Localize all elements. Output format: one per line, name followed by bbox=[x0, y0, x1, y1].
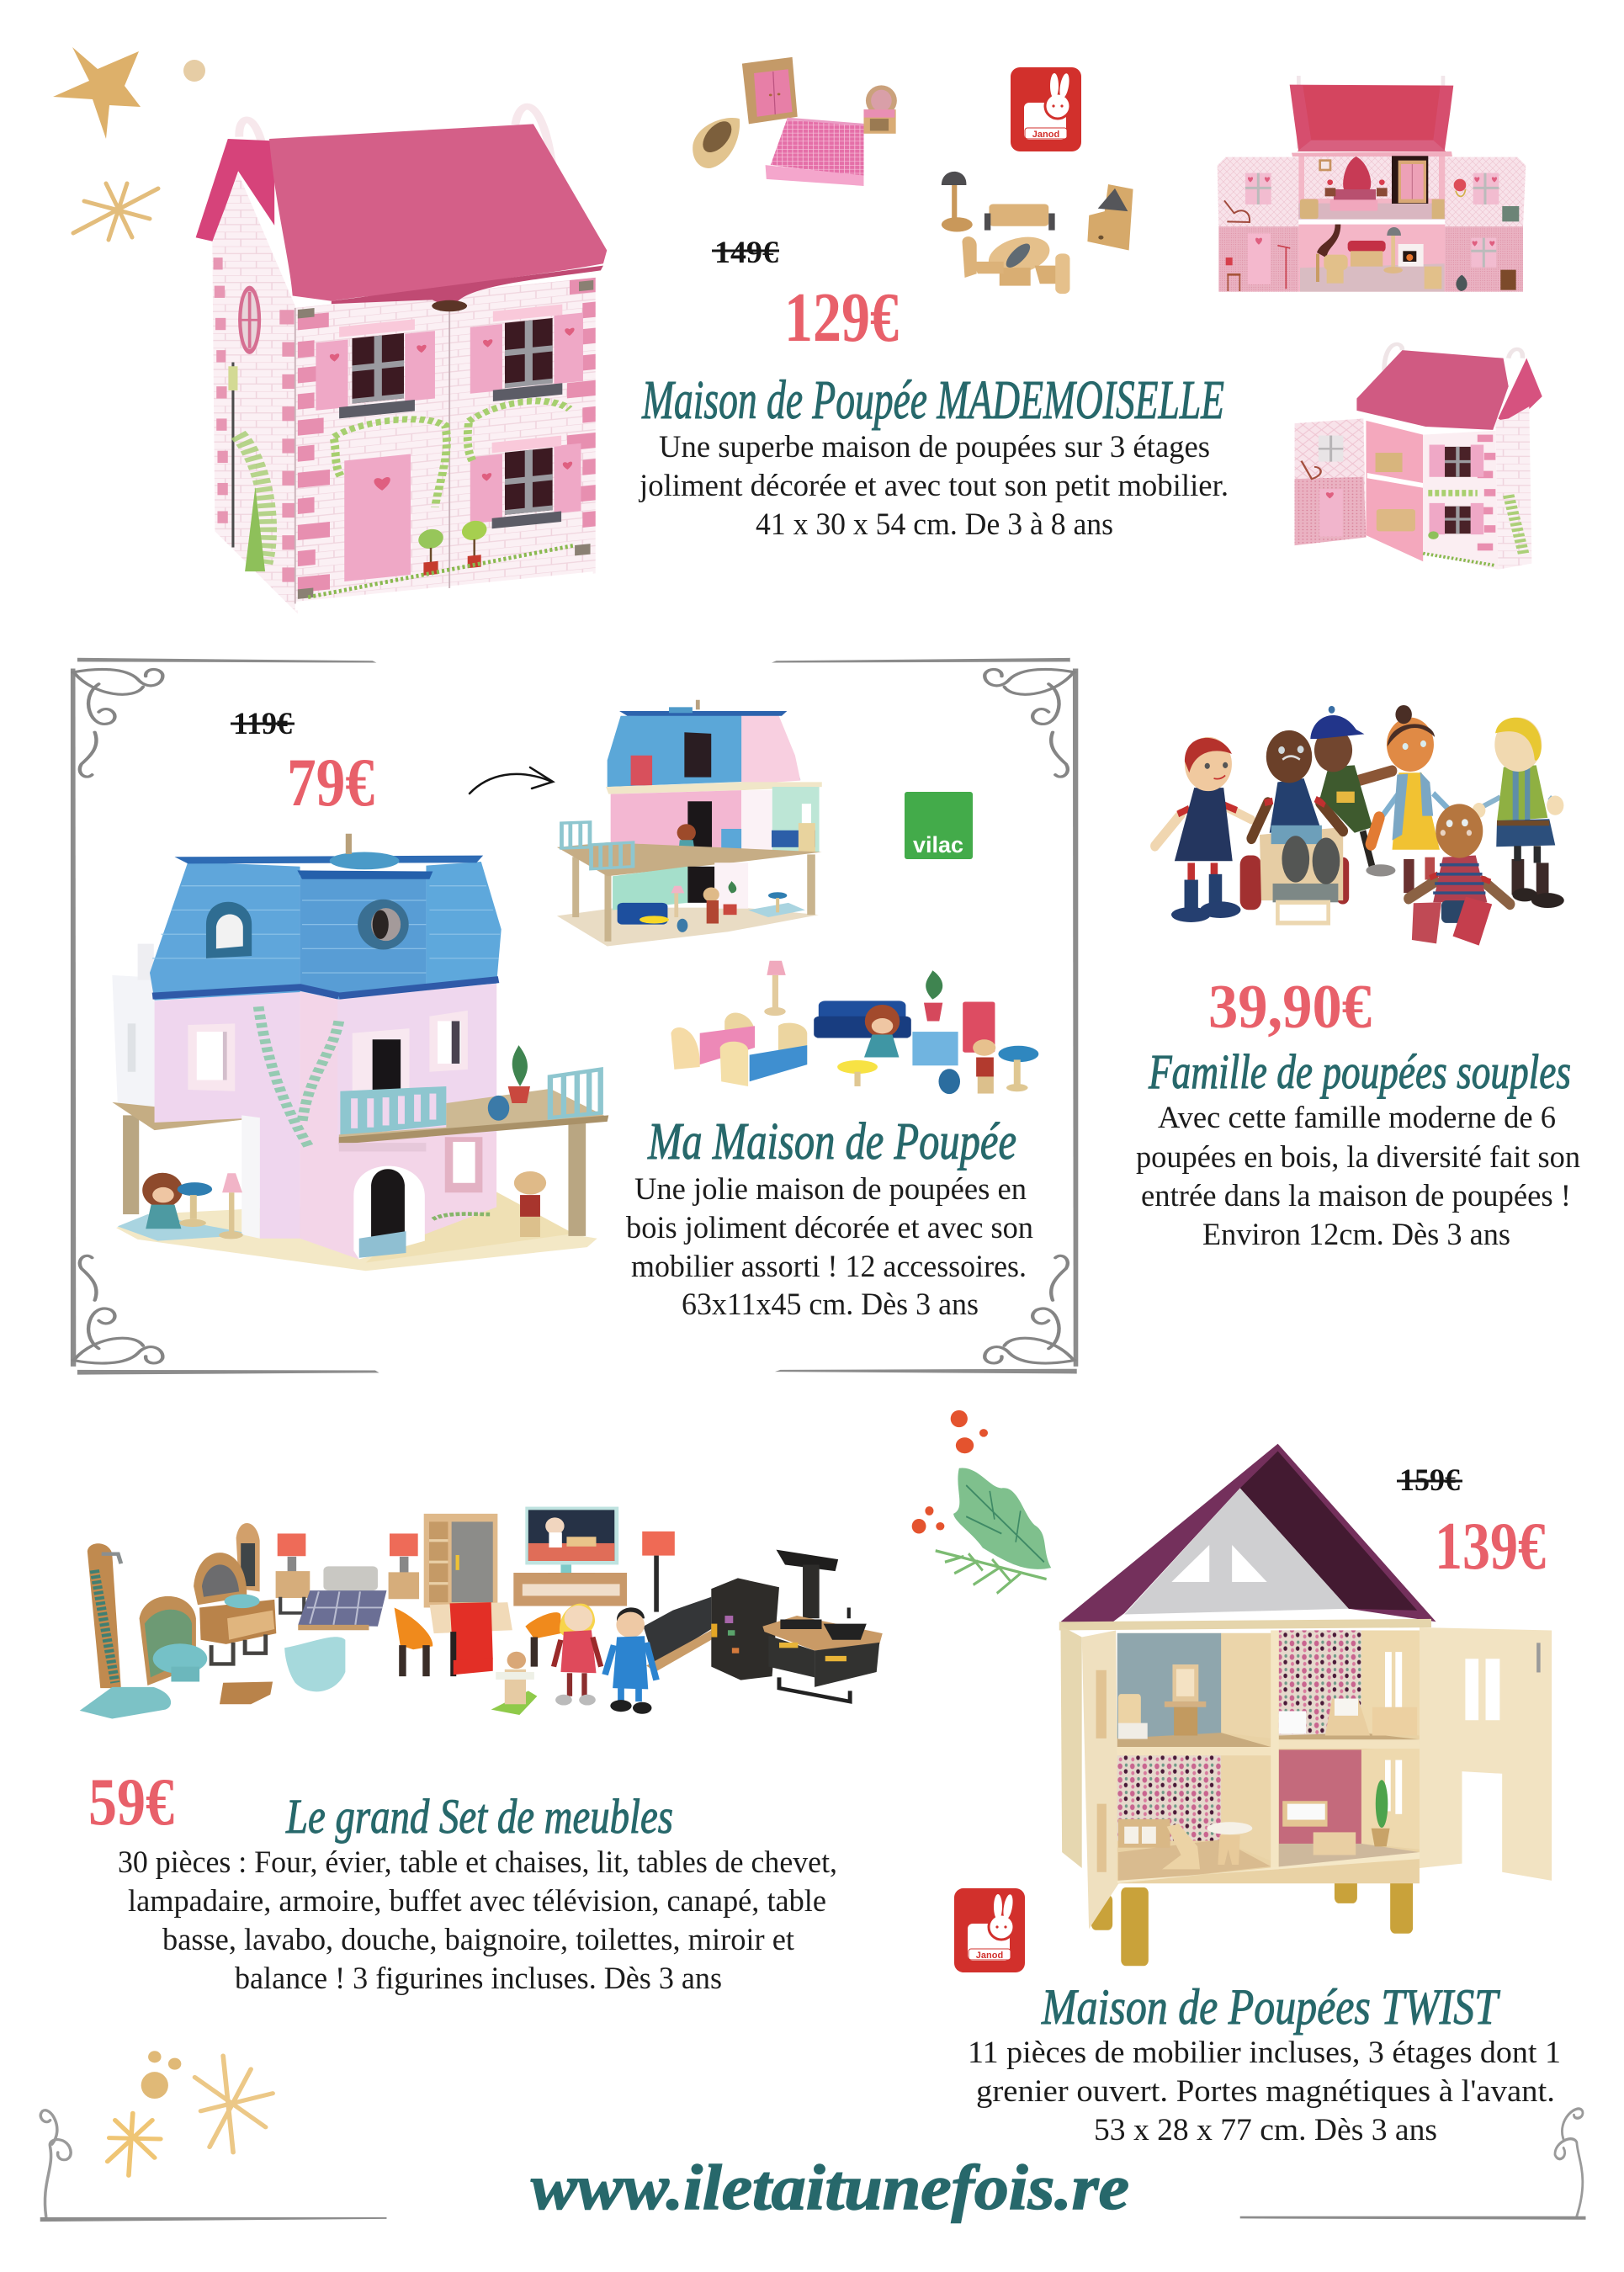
price 139: 139€ bbox=[1435, 1510, 1546, 1584]
main roof bbox=[269, 124, 607, 301]
description: Twist: 11 pièces de mobilier incluses, 3 étages dont 1 bbox=[968, 2036, 1561, 2070]
illustration: Twist dollhouse bbox=[1059, 1444, 1552, 1966]
panel frame: Ma Maison de Poupée bbox=[71, 658, 1078, 1375]
decoration: flourish and line bottom left bbox=[40, 2110, 386, 2222]
woman figure bbox=[554, 1604, 601, 1706]
illustration: small blue house open side bbox=[557, 700, 822, 946]
description: Famille bbox=[1136, 1101, 1580, 1252]
old price 159: 159€ bbox=[1399, 1463, 1460, 1498]
bathtub bbox=[284, 1637, 345, 1691]
plant and cat bbox=[488, 1045, 530, 1121]
side wall bbox=[212, 173, 298, 613]
plant bbox=[924, 970, 942, 1021]
mirror and vanity bbox=[194, 1523, 276, 1664]
toilet panel bbox=[140, 1596, 207, 1685]
ivy bbox=[334, 397, 570, 518]
terrace railing bbox=[550, 1070, 601, 1117]
yellow table bbox=[837, 1060, 878, 1086]
base bbox=[116, 1202, 597, 1271]
description: Ma Maison de Poupée: mobilier assorti ! 12 accessoires. bbox=[631, 1250, 1027, 1284]
mini furniture bbox=[1118, 1664, 1417, 1869]
bathtub bbox=[693, 118, 740, 168]
description: Famille: poupées en bois, la diversité fait son bbox=[1136, 1140, 1580, 1175]
description: Mademoiselle: Une superbe maison de poupées sur 3 étages bbox=[659, 430, 1210, 464]
gable roof edge bbox=[196, 139, 274, 242]
dormer windows bbox=[206, 902, 252, 958]
decoration: gold stars and dots bottom left bbox=[108, 2051, 273, 2175]
title: Ma Maison de Poupée: Ma Maison de Poupée bbox=[647, 1113, 1016, 1171]
title: Maison de Poupée MADEMOISELLE: Maison de Poupée MADEMOISELLE bbox=[641, 369, 1224, 431]
description: Twist: 53 x 28 x 77 cm. Dès 3 ans bbox=[1094, 2113, 1437, 2147]
illustration: large blue dollhouse bbox=[112, 834, 608, 1271]
wardrobe bbox=[742, 57, 798, 124]
title: Le grand Set de meubles: Le grand Set de meubles bbox=[285, 1789, 673, 1844]
old price 119: 119€ bbox=[233, 707, 292, 741]
decoration: gold asterisk top left bbox=[73, 183, 158, 240]
pink bed bbox=[671, 1012, 755, 1070]
description: set de meubles: lampadaire, armoire, buffet avec télévision, canapé, table bbox=[128, 1884, 826, 1919]
bed bbox=[298, 1566, 386, 1630]
illustration: Mademoiselle dollhouse closed bbox=[196, 107, 607, 613]
girl figure bbox=[864, 1005, 900, 1058]
doll with red cap bbox=[1155, 737, 1251, 922]
wooden figures bbox=[142, 1171, 546, 1239]
description: set de meubles bbox=[118, 1845, 837, 1996]
baby figure bbox=[491, 1652, 537, 1715]
sitting child doll bbox=[1409, 804, 1510, 946]
posts bbox=[123, 1115, 586, 1236]
decoration: flourish and line bottom right bbox=[1240, 2109, 1586, 2220]
roof handles bbox=[239, 107, 553, 189]
doll in wheelchair bbox=[1240, 730, 1349, 923]
illustration: large furniture set bbox=[80, 1507, 883, 1718]
television and buffet bbox=[513, 1507, 627, 1606]
topiary bbox=[418, 519, 486, 576]
dining set bbox=[395, 1602, 560, 1676]
price 79: 79€ bbox=[287, 744, 374, 820]
floor lamp bbox=[642, 1531, 675, 1612]
blue roof bbox=[150, 862, 300, 1001]
description: Mademoiselle: joliment décorée et avec tout son petit mobilier. bbox=[638, 469, 1229, 503]
pink lamp bbox=[764, 961, 786, 1016]
illustration: vilac furniture set bbox=[671, 961, 1038, 1094]
wall windows bbox=[188, 1023, 235, 1091]
roof bbox=[1060, 1444, 1436, 1627]
description: Mademoiselle: 41 x 30 x 54 cm. De 3 à 8 ans bbox=[756, 507, 1113, 542]
cyan cupboard bbox=[912, 1032, 958, 1065]
blue bed bbox=[720, 1023, 807, 1086]
description: Twist bbox=[968, 2036, 1561, 2147]
front wall bbox=[295, 278, 596, 611]
balcony railing bbox=[340, 1086, 446, 1136]
pink walls bbox=[155, 991, 300, 1239]
illustration: Mademoiselle dollhouse open front bbox=[1218, 76, 1526, 292]
inner windows bbox=[1385, 1652, 1402, 1814]
description: set de meubles: balance ! 3 figurines incluses. Dès 3 ans bbox=[235, 1961, 722, 1996]
scale bbox=[220, 1681, 273, 1704]
terrace bbox=[339, 1089, 608, 1143]
logo: vilac: vilac bbox=[913, 832, 963, 857]
shower bbox=[80, 1543, 171, 1718]
illustration: living room wooden set bbox=[942, 172, 1133, 294]
blue stool bbox=[998, 1046, 1038, 1091]
right door bbox=[1420, 1627, 1552, 1881]
red cabinet bbox=[963, 1001, 995, 1053]
price 129: 129€ bbox=[784, 279, 899, 357]
description: set de meubles: 30 pièces : Four, évier, table et chaises, lit, tables de chevet, bbox=[118, 1845, 837, 1880]
decoration: leaf and berries bbox=[912, 1410, 1051, 1594]
illustration: Mademoiselle dollhouse half open bbox=[1295, 344, 1542, 570]
price 59: 59€ bbox=[88, 1765, 174, 1839]
illustration: family of wooden dolls bbox=[1155, 705, 1564, 946]
doll with blue cap bbox=[1310, 706, 1395, 877]
ivy bbox=[258, 1006, 339, 1147]
old price 149: 149€ bbox=[714, 236, 779, 270]
kitchen stove bbox=[762, 1550, 883, 1701]
doll with bun bbox=[1371, 705, 1448, 893]
logo: Janod top bbox=[1011, 67, 1081, 151]
logo: vilac bbox=[905, 792, 973, 859]
vanity bbox=[863, 85, 897, 134]
kitchen fridge bbox=[711, 1578, 779, 1680]
description: Ma Maison de Poupée bbox=[626, 1172, 1033, 1322]
bed bbox=[766, 119, 863, 186]
legs bbox=[1091, 1862, 1413, 1966]
upper door bbox=[353, 1028, 410, 1103]
description: Ma Maison de Poupée: bois joliment décorée et avec son bbox=[626, 1211, 1033, 1245]
logo: Janod bottom bbox=[954, 1888, 1025, 1972]
description: Famille: entrée dans la maison de poupées ! bbox=[1141, 1179, 1571, 1213]
left open door bbox=[1218, 157, 1298, 292]
door bbox=[344, 454, 411, 581]
description: Famille: Avec cette famille moderne de 6 bbox=[1158, 1101, 1556, 1135]
right open door bbox=[1445, 157, 1526, 292]
description: Twist: grenier ouvert. Portes magnétiques à l'avant. bbox=[976, 2074, 1555, 2109]
wardrobe bbox=[424, 1514, 497, 1607]
illustration: bedroom furniture wooden set bbox=[693, 57, 897, 186]
blue sofa bbox=[814, 1001, 911, 1038]
description: Ma Maison de Poupée: 63x11x45 cm. Dès 3 ans bbox=[682, 1287, 979, 1322]
interior rooms bbox=[1298, 156, 1445, 221]
cat and boy figures bbox=[938, 1039, 995, 1094]
decoration: gold star top left bbox=[53, 47, 205, 139]
blond doll bbox=[1473, 718, 1564, 908]
rooms bbox=[1117, 1633, 1420, 1883]
white side wall bbox=[112, 975, 155, 1122]
price 39,90: 39,90€ bbox=[1208, 973, 1372, 1042]
nightstand lamps bbox=[276, 1533, 419, 1613]
description: set de meubles: basse, lavabo, douche, baignoire, toilettes, miroir et bbox=[162, 1923, 795, 1957]
website url: www.iletaitunefois.re bbox=[531, 2153, 1129, 2223]
arrow to small house bbox=[470, 767, 553, 794]
sofa bbox=[644, 1597, 711, 1672]
windows and shutters bbox=[316, 302, 583, 546]
carcass and left door bbox=[1059, 1619, 1431, 1630]
description: Famille: Environ 12cm. Dès 3 ans bbox=[1202, 1218, 1510, 1252]
ground floor bbox=[353, 1166, 425, 1259]
man figure bbox=[605, 1607, 656, 1714]
description: Mademoiselle bbox=[638, 430, 1229, 542]
title: Maison de Poupées TWIST: Maison de Poupées TWIST bbox=[1041, 1979, 1500, 2035]
description: Ma Maison de Poupée: Une jolie maison de poupées en bbox=[634, 1172, 1027, 1207]
